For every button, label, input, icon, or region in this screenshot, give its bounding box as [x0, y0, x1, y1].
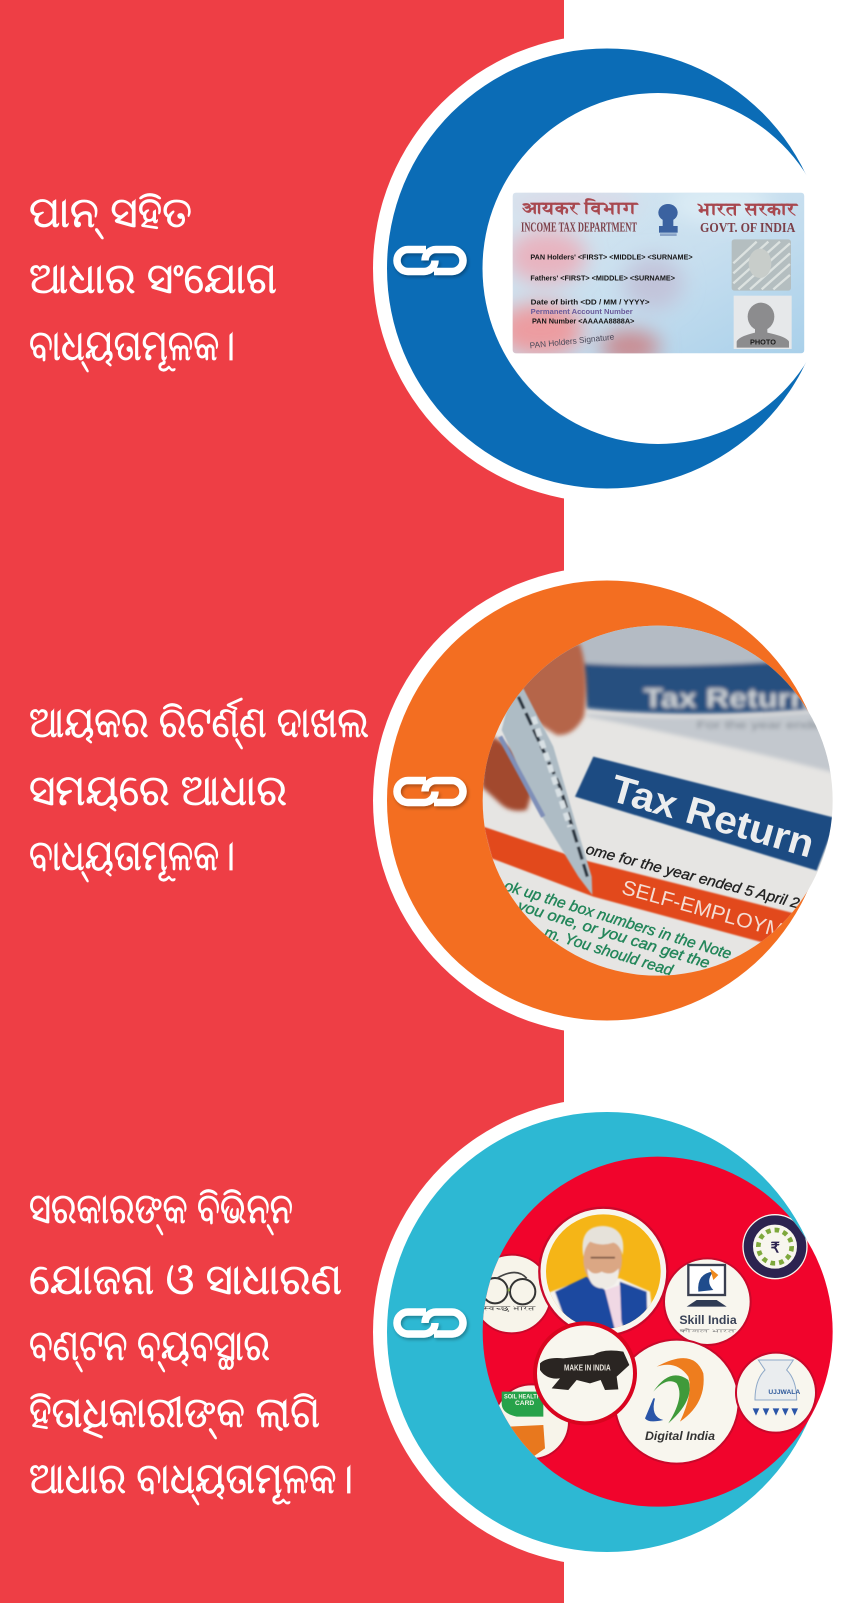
icon: chain link [397, 250, 463, 272]
image: tax return form [480, 623, 837, 980]
orange circle [387, 580, 827, 1020]
card heading: govt of India: भारत सरकार [696, 199, 799, 219]
heading: government schemes text: ସରକାରଙ୍କ ବିଭିନ୍ନ [29, 1185, 293, 1235]
hologram [732, 239, 791, 291]
logo: Digital India [615, 1340, 739, 1464]
main blue band [575, 757, 837, 871]
heading: tax return text: ବାଧ୍ୟତାମୂଳକ। [29, 832, 235, 882]
white ring [373, 34, 841, 502]
red background panel [0, 0, 564, 1603]
logo: Skill India: Skill India [679, 1313, 737, 1327]
card fields: Permanent Account Number [531, 307, 633, 316]
heading: PAN linking text [29, 189, 277, 372]
image: PAN card: INCOME TAX DEPARTMENT [521, 219, 637, 234]
logo: Make in India: MAKE IN INDIA [564, 1363, 611, 1373]
signature label: PAN Holders Signature [529, 331, 615, 350]
white ring [373, 566, 841, 1034]
heading: government schemes text: ଯୋଜନା ଓ ସାଧାରଣ [29, 1256, 342, 1304]
image: PAN card [512, 192, 804, 354]
image: scheme logos [472, 1153, 837, 1510]
form subtitle: SELF-EMPLOYM [619, 876, 786, 943]
logo: financial inclusion seal [742, 1214, 808, 1279]
logo: soil health card [494, 1384, 569, 1459]
logo: Skill India [664, 1258, 751, 1345]
card fields: PAN Holders' <FIRST> <MIDDLE> <SURNAME> [530, 252, 693, 261]
icon: chain link [397, 780, 463, 802]
icon: chain link [397, 1312, 463, 1334]
heading: government schemes text: ହିତାଧିକାରୀଙ୍କ ଲାଗି [29, 1389, 320, 1439]
icon: national emblem [658, 204, 678, 236]
logo: Swachh Bharat [483, 1254, 550, 1334]
heading: government schemes text: ବଣ୍ଟନ ବ୍ୟବସ୍ଥାର [29, 1322, 270, 1372]
photo placeholder [734, 296, 792, 349]
heading: PAN linking text: ପାନ୍ ସହିତ [29, 189, 192, 239]
green instructions: you one, or you can get the [514, 897, 712, 972]
heading: tax return text [29, 698, 369, 882]
image: tax return form: For the year ended [697, 719, 830, 731]
green instructions: m. You should read [542, 924, 675, 980]
logo: Ujjwala: UJJWALA [768, 1389, 800, 1396]
panel: government schemes [29, 1098, 841, 1566]
heading: government schemes text: ଆଧାର ବାଧ୍ୟତାମୂଳକ। [29, 1455, 353, 1505]
cyan circle [387, 1112, 827, 1552]
card fields: PAN Number <AAAAA8888A> [532, 317, 634, 326]
panel: income tax return [29, 566, 841, 1034]
heading: PAN linking text: ବାଧ୍ୟତାମୂଳକ। [29, 322, 235, 372]
photo placeholder: PHOTO [750, 338, 776, 347]
card fields: Fathers' <FIRST> <MIDDLE> <SURNAME> [530, 273, 675, 282]
heading: government schemes text [29, 1185, 353, 1505]
logo: Make in India [535, 1323, 635, 1423]
image: PAN card: GOVT. OF INDIA [700, 220, 796, 235]
logo: Skill India: कौशल भारत [678, 1327, 738, 1334]
heading: tax return text: ସମୟରେ ଆଧାର [29, 767, 287, 815]
form line: ome for the year ended 5 April 2 [584, 842, 801, 912]
white inner circle [482, 93, 834, 444]
logo: portrait [539, 1208, 667, 1336]
card fields: Date of birth <DD / MM / YYYY> [531, 298, 650, 307]
form title: Tax Return [606, 767, 819, 866]
pen [500, 688, 592, 895]
blue circle [387, 48, 827, 488]
logo: Swachh Bharat: स्वच्छ भारत [482, 1306, 537, 1313]
orange band [483, 827, 797, 943]
card heading: income tax department: आयकर विभाग [522, 198, 638, 218]
green instructions: ok up the box numbers in the Note [502, 878, 733, 963]
image: tax return form: Tax Return [643, 682, 810, 713]
panel: PAN linking [29, 34, 841, 502]
white ring [373, 1098, 841, 1566]
card fields [530, 252, 693, 326]
heading: tax return text: ଆୟକର ରିଟର୍ଣ୍ଣ ଦାଖଲ [29, 698, 369, 749]
logo: soil health card: SOIL HEALTH [504, 1393, 541, 1400]
heading: PAN linking text: ଆଧାର ସଂଯୋଗ [29, 255, 277, 303]
logo: Ujjwala [736, 1353, 816, 1433]
logo: Digital India: Digital India [645, 1429, 715, 1443]
logo: financial inclusion seal: ₹ [771, 1241, 781, 1257]
fingers [480, 643, 586, 811]
logo: soil health card: CARD [515, 1400, 534, 1407]
